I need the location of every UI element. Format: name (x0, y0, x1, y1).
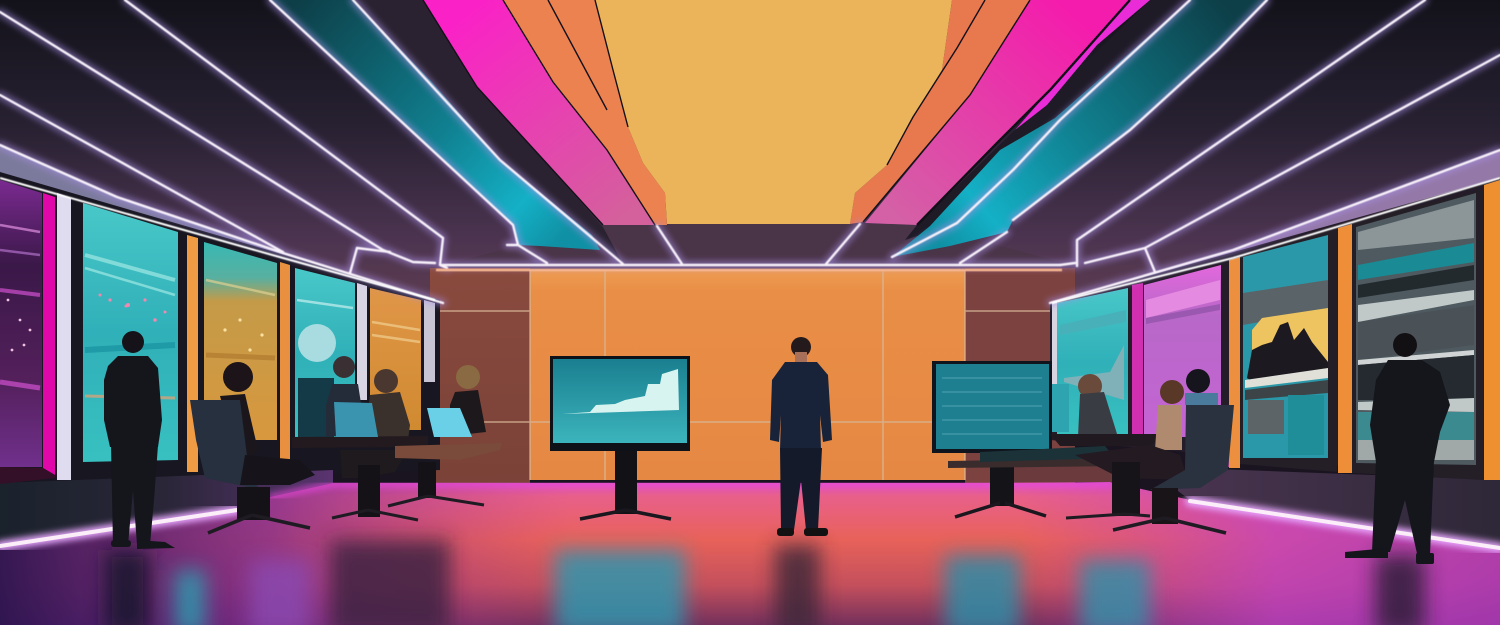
low brown strip behind right desk (1013, 465, 1113, 482)
left lavender band under ceiling (0, 145, 443, 303)
ceiling panel: left teal (270, 0, 600, 250)
strip: orange 3 (1484, 180, 1500, 480)
strip: orange 1 (187, 235, 198, 472)
desk keyboard (980, 446, 1115, 462)
chair lap (240, 455, 315, 485)
ceiling panel: left wedge (353, 0, 623, 264)
monitor: small right (1052, 384, 1069, 432)
woman in chair (220, 362, 258, 470)
ceiling seams (423, 0, 1130, 225)
lower wall right (1170, 468, 1500, 548)
neon ceiling glow (0, 0, 1500, 303)
ceiling panel: left pink (423, 0, 655, 225)
screen detail: right grid stripes (1060, 200, 1474, 460)
right lavender band under ceiling (1050, 150, 1500, 306)
chair (190, 400, 262, 490)
strip: white frame (1052, 302, 1057, 430)
screen (553, 359, 687, 443)
strip: white 2 (357, 283, 367, 400)
desk bases (332, 496, 484, 520)
strip: magenta below pink (1222, 405, 1229, 467)
back wall: orange centre (530, 270, 965, 480)
back wall panel seams (436, 270, 1050, 480)
window: amber screen (204, 242, 277, 440)
ceiling panel: right teal (892, 0, 1267, 257)
man black hair (1185, 369, 1218, 405)
chair base (1113, 518, 1226, 533)
window: far-left purple screen (0, 180, 42, 467)
person: behind, jacket (326, 356, 362, 436)
chair column (1152, 488, 1178, 524)
ceiling panel: right orange (850, 0, 1030, 224)
right wall windows (1052, 180, 1500, 480)
group: seated people left (190, 356, 502, 533)
chair column (237, 487, 270, 520)
ceiling panel: soffit above back wall (440, 224, 1075, 266)
strip: white 3 (424, 300, 435, 382)
person: standing far right (1345, 333, 1450, 564)
strip: white pillar (57, 193, 71, 480)
screen detail: left window lines (0, 225, 420, 398)
rising chart (562, 369, 679, 414)
man with grey jacket (1078, 374, 1118, 437)
window: teal curve screen (1057, 288, 1128, 437)
person: standing centre (770, 337, 832, 536)
person: back teal monitor (298, 378, 334, 438)
woman with brown hair (1155, 380, 1184, 450)
neon ceiling lines (0, 0, 1500, 303)
strip: orange 2 (280, 262, 290, 470)
stand (615, 450, 637, 514)
window: chart screen (1243, 235, 1328, 458)
monitor: centre left (550, 356, 690, 519)
chair (1150, 405, 1234, 490)
laptop 1 (334, 402, 378, 437)
neon floor edges (0, 484, 1500, 548)
window top neon (0, 178, 1500, 303)
back wall: right brown panel (965, 268, 1075, 483)
monitor: centre right (932, 361, 1052, 517)
window: frame 4 (1352, 190, 1483, 480)
desk right side (395, 443, 502, 460)
window: grey screen (1356, 193, 1476, 465)
ceiling panel: right pink (865, 0, 1130, 225)
strip: orange 2 (1338, 224, 1352, 473)
window: frame 3 (1240, 228, 1337, 472)
desk left (292, 436, 428, 448)
person: woman with curly hair (450, 365, 486, 436)
group: seated people right (948, 369, 1234, 533)
window: orange screen (370, 288, 421, 430)
leg base (1066, 514, 1150, 518)
ceiling panel: left orange (503, 0, 667, 225)
person: man with laptop (340, 369, 410, 478)
left wall windows (0, 180, 435, 484)
floor (0, 482, 1500, 625)
desk legs (358, 465, 380, 517)
ceiling panel: central yellow (595, 0, 952, 224)
screen detail: left sparkles (7, 294, 336, 362)
lower wall left (0, 470, 333, 547)
leg column (1112, 462, 1140, 516)
right wall: window band (1050, 178, 1500, 480)
ceiling: dark base (0, 0, 1500, 305)
person: standing far left (104, 331, 175, 549)
floor reflections (105, 540, 1425, 625)
strip: magenta (1132, 283, 1143, 437)
window: teal screen (83, 203, 178, 462)
lap (1075, 445, 1188, 480)
chair base (208, 515, 310, 533)
window: teal globe screen (295, 268, 355, 440)
strip: sill under far-left window (0, 467, 55, 484)
desk right (948, 458, 1125, 468)
window: pink screen (1144, 265, 1221, 437)
ceiling panel: right wedge (905, 0, 1190, 240)
screen band: grey (1243, 280, 1328, 325)
screen detail: right chart mountains (1245, 308, 1328, 455)
desk top (1050, 434, 1165, 446)
ceiling accent: magenta sliver (1015, 0, 1150, 130)
strip: orange 1 (1229, 257, 1240, 468)
laptop 2 (427, 408, 472, 437)
left wall: window band (0, 172, 440, 485)
back wall: left brown panel (430, 268, 530, 483)
strip: magenta (43, 193, 55, 475)
base (580, 510, 671, 519)
